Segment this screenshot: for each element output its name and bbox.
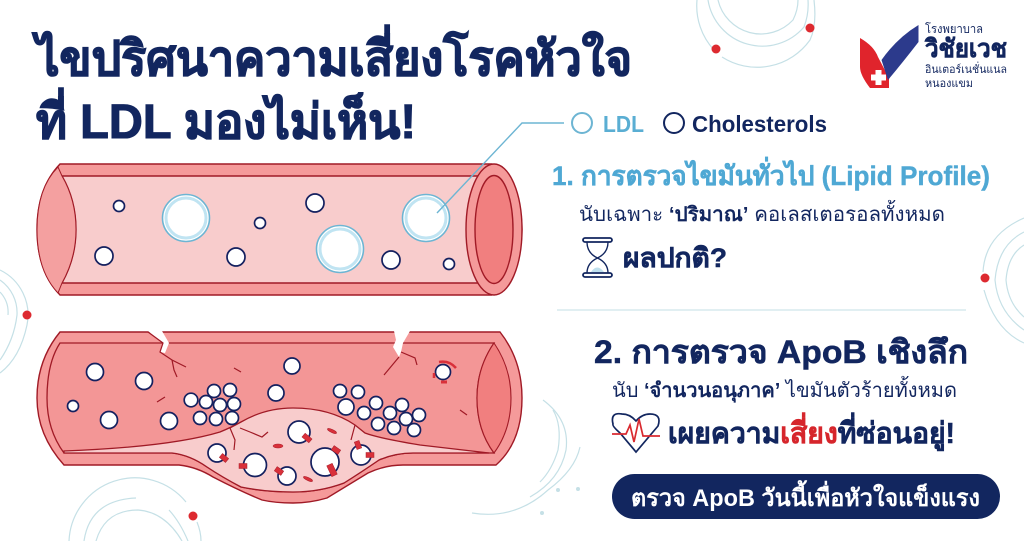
icon: heart with pulse <box>612 414 660 452</box>
outer wall <box>37 164 522 295</box>
artery 1: healthy <box>37 164 522 295</box>
section 2 <box>594 334 968 452</box>
logo <box>860 22 1007 90</box>
decorative arcs left <box>0 270 32 373</box>
cholesterol particles <box>95 194 454 270</box>
cholesterol in lumen <box>68 358 456 436</box>
section 2 heading: 2. การตรวจ ApoB เชิงลึก <box>594 334 968 370</box>
section 2 description: นับ ‘จำนวนอนุภาค’ ไขมันตัวร้ายทั้งหมด <box>612 376 957 403</box>
LDL particles <box>162 194 450 272</box>
plaque <box>64 408 489 492</box>
legend <box>572 111 827 137</box>
artery 2: plaque <box>37 331 522 503</box>
logo text: วิชัยเวช <box>924 35 1007 63</box>
lumen <box>47 343 494 492</box>
title: ที่ LDL มองไม่เห็น! <box>36 87 416 149</box>
decorative arcs bottom <box>69 478 201 541</box>
left opening shade <box>37 167 76 293</box>
logo text: หนองแขม <box>925 78 973 90</box>
decorative arcs top <box>697 0 815 67</box>
wall cracks <box>148 331 467 450</box>
logo mark: red wing <box>860 38 889 88</box>
leader line <box>437 123 564 213</box>
call to action button <box>612 474 1000 519</box>
title <box>31 24 632 149</box>
logo mark: blue check <box>882 25 918 80</box>
logo text <box>924 22 1007 90</box>
right opening <box>477 343 511 453</box>
legend: LDL: LDL <box>603 111 644 137</box>
logo text: โรงพยาบาล <box>925 22 983 36</box>
section 1 description: นับเฉพาะ ‘ปริมาณ’ คอเลสเตอรอลทั้งหมด <box>579 200 945 226</box>
logo mark: white cross <box>871 70 886 85</box>
outer wall <box>37 332 522 503</box>
section 1 heading: 1. การตรวจไขมันทั่วไป (Lipid Profile) <box>552 156 990 191</box>
legend: Cholesterols: Cholesterols <box>692 111 827 137</box>
particles in plaque <box>208 421 374 485</box>
right opening <box>466 164 522 295</box>
lumen <box>62 176 480 283</box>
decorative arcs right <box>980 218 1024 343</box>
section 1 <box>552 156 990 277</box>
title: ไขปริศนาความเสี่ยงโรคหัวใจ <box>31 24 632 86</box>
logo text: อินเตอร์เนชั่นแนล <box>925 61 1007 76</box>
call to action button: ตรวจ ApoB วันนี้เพื่อหัวใจแข็งแรง <box>631 479 980 512</box>
icon: hourglass <box>583 238 612 277</box>
normal result label: ผลปกติ? <box>623 243 727 273</box>
reveal hidden risk text: เผยความเสี่ยงที่ซ่อนอยู่! <box>668 412 955 451</box>
legend: LDL <box>572 111 644 137</box>
decorative arcs middle right <box>472 400 580 515</box>
